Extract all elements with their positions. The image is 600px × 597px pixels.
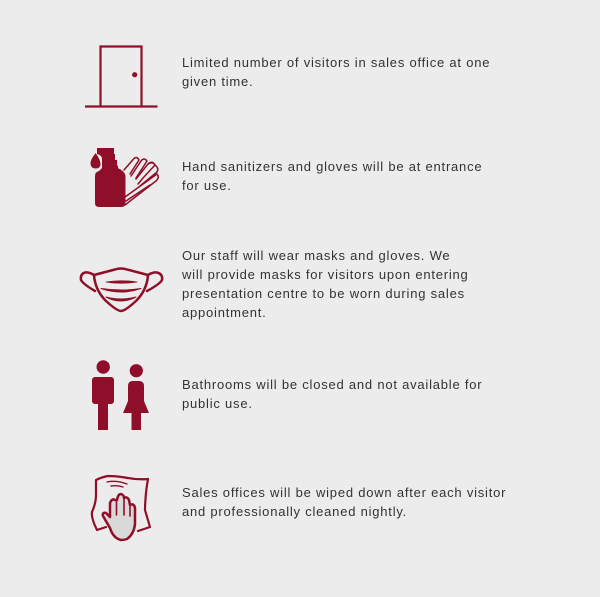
icon: door [85, 46, 158, 106]
text: hand sanitizers: for use. [182, 178, 232, 193]
text: bathrooms closed: public use. [182, 396, 253, 411]
text: hand sanitizers [182, 159, 482, 193]
text: cleaning: Sales offices will be wiped down after each visitor [182, 485, 506, 500]
text: staff masks [182, 248, 469, 320]
text: hand sanitizers: Hand sanitizers and gloves will be at entrance [182, 159, 482, 174]
text: bathrooms closed [182, 377, 482, 411]
text: cleaning [182, 485, 506, 519]
text: staff masks: presentation centre to be worn during sales [182, 286, 465, 301]
text: limited visitors [182, 55, 490, 89]
text: staff masks: appointment. [182, 305, 267, 320]
icon: hand wiping with cloth [92, 476, 150, 540]
text: staff masks: Our staff will wear masks and gloves. We [182, 248, 450, 263]
text: bathrooms closed: Bathrooms will be closed and not available for [182, 377, 482, 392]
text: staff masks: will provide masks for visitors upon entering [182, 267, 469, 282]
icon: face mask [81, 268, 162, 311]
icon: man and woman [92, 360, 149, 430]
text: cleaning: and professionally cleaned nightly. [182, 504, 407, 519]
icon: hand sanitizer and gloves [90, 148, 158, 207]
text: limited visitors: given time. [182, 74, 253, 89]
text: limited visitors: Limited number of visitors in sales office at one [182, 55, 490, 70]
